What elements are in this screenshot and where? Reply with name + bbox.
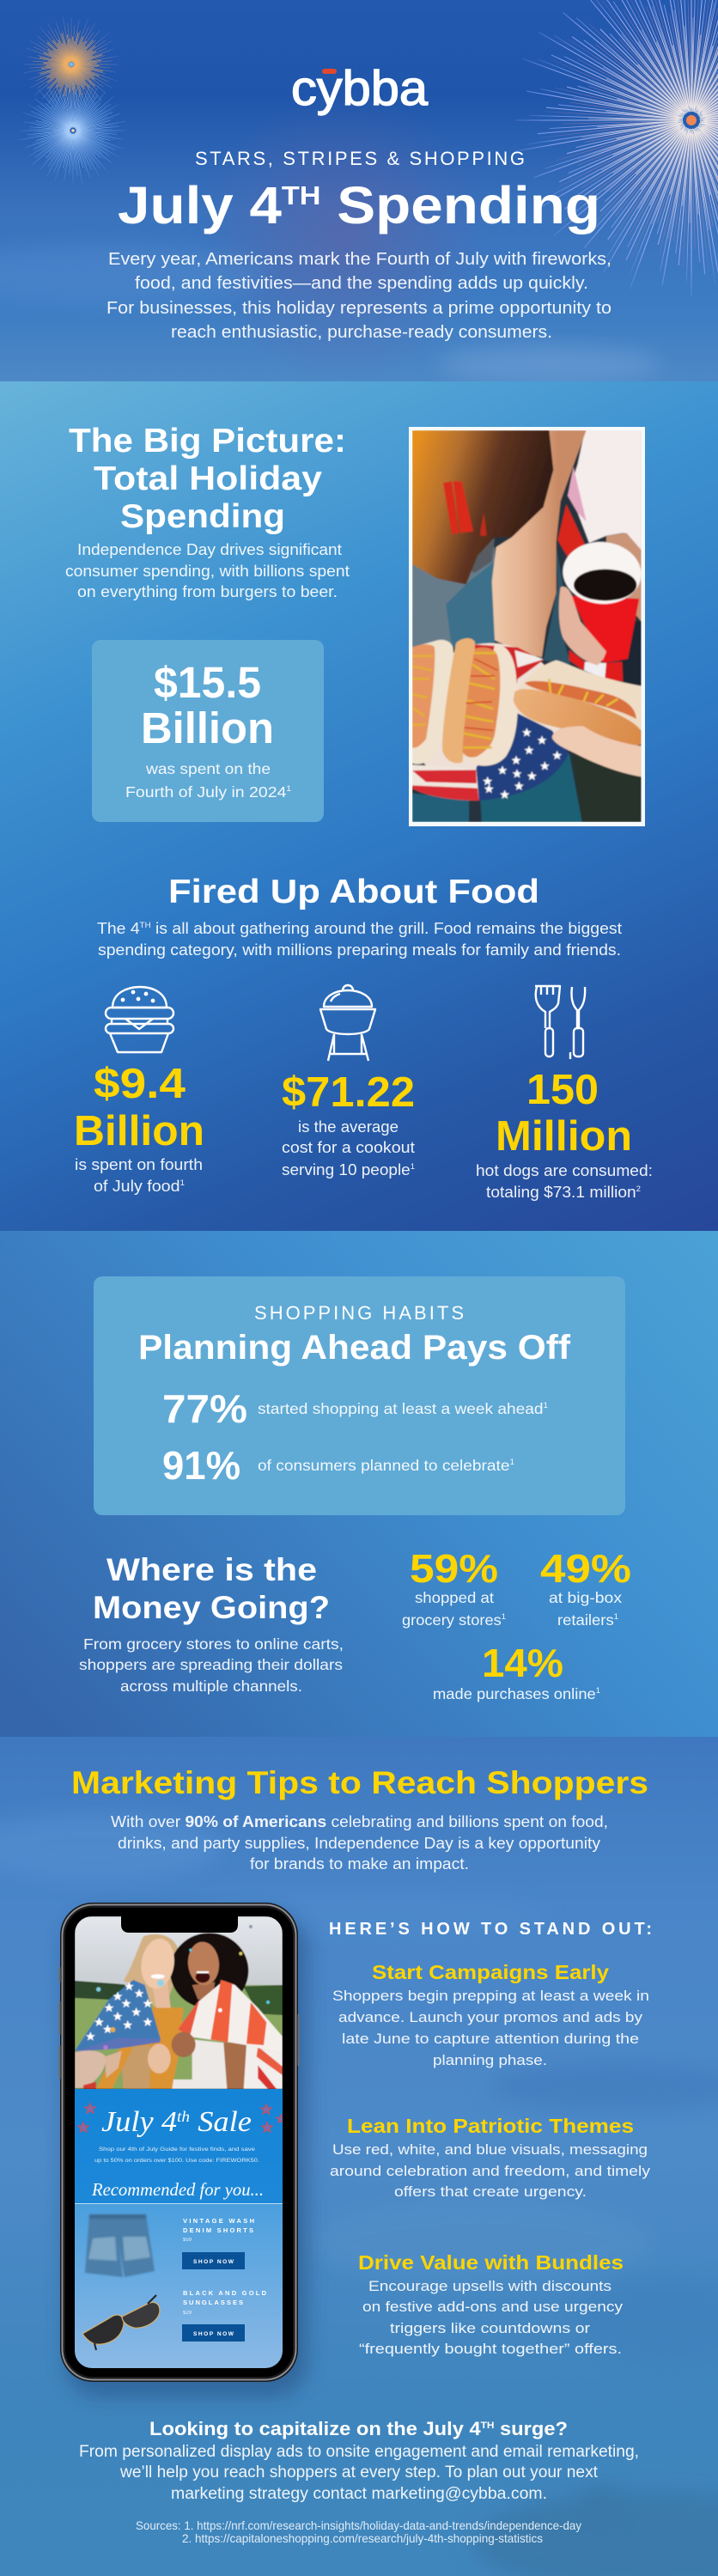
heading: planning ahead: Planning Ahead Pays Off — [138, 1329, 571, 1367]
stat: online: 1 — [596, 1686, 600, 1695]
stat: big-box retailers — [540, 1546, 631, 1629]
eyebrow: STARS, STRIPES & SHOPPING — [195, 148, 525, 169]
money text: across multiple channels. — [120, 1678, 302, 1695]
stat: cookout cost: is the average — [298, 1118, 399, 1136]
sources: 2. https://capitaloneshopping.com/research/july-4th-shopping-statistics — [182, 2531, 543, 2545]
stat: 91 percent: 91% — [162, 1443, 240, 1488]
call to action: we’ll help you reach shoppers at every step. To plan out your next — [119, 2463, 599, 2482]
stat: grocery stores: grocery stores — [402, 1611, 497, 1629]
food intro text: TH — [140, 921, 151, 929]
stat: food spend — [74, 1061, 204, 1195]
stat: cookout cost: $71.22 — [282, 1069, 415, 1116]
tip: start campaigns early: planning phase. — [433, 2052, 547, 2068]
food intro text — [97, 920, 622, 959]
stat: 77 percent: 77% — [162, 1386, 247, 1431]
money text: shoppers are spreading their dollars — [79, 1656, 343, 1673]
call to action — [79, 2418, 639, 2503]
stat: online: made purchases online — [433, 1685, 588, 1702]
heading: where is the money going — [93, 1552, 330, 1625]
phone heading: Sale — [190, 2106, 252, 2138]
stat: hot dogs: Million — [496, 1113, 632, 1160]
logo: cybba — [291, 61, 428, 116]
stat: online: 14% — [482, 1641, 563, 1685]
intro text: For businesses, this holiday represents a prime opportunity to — [106, 299, 612, 318]
stat: big-box retailers: 49% — [540, 1546, 631, 1591]
callout: total spending: $15.5 — [154, 658, 261, 707]
tip: start campaigns early: late June to capture attention during the — [342, 2031, 639, 2047]
sources: Sources: 1. https://nrf.com/research-insights/holiday-data-and-trends/independence-day — [136, 2518, 581, 2532]
eyebrow: shopping habits: SHOPPING HABITS — [254, 1302, 464, 1324]
heading: the big picture — [69, 423, 346, 535]
call to action: From personalized display ads to onsite engagement and email remarketing, — [79, 2443, 639, 2461]
heading: the big picture: Spending — [120, 498, 285, 535]
icon: grill tools — [535, 986, 585, 1059]
tip: bundles: triggers like countdowns or — [390, 2320, 590, 2336]
big picture text: on everything from burgers to beer. — [77, 583, 338, 600]
phone heading: July 4 — [101, 2106, 172, 2138]
stat: grocery stores: 59% — [410, 1546, 498, 1591]
tip: bundles — [358, 2251, 624, 2357]
icon: sunglasses — [82, 2295, 160, 2350]
button: shop now — [182, 2252, 245, 2269]
marketing intro text — [111, 1813, 608, 1873]
intro text: food, and festivities—and the spending adds up quickly. — [135, 274, 588, 293]
stat: hot dogs — [476, 1067, 653, 1201]
big picture text: Independence Day drives significant — [77, 541, 342, 558]
panel: big picture and food background — [0, 381, 718, 1231]
heading: the big picture: The Big Picture: — [69, 423, 346, 460]
stat: food spend: 1 — [180, 1178, 185, 1187]
icon: firework small blue — [17, 75, 129, 186]
product text: shorts: DENIM SHORTS — [183, 2226, 253, 2234]
tip: start campaigns early — [332, 1961, 649, 2068]
icon: denim shorts — [85, 2214, 155, 2277]
icon: firework large — [506, 0, 718, 306]
stat: 91 percent — [162, 1443, 514, 1488]
panel: marketing tips background — [0, 1737, 718, 2576]
stat: grocery stores: shopped at — [415, 1589, 494, 1606]
phone offer text: Shop our 4th of July Guide for festive finds, and save — [99, 2147, 255, 2153]
stat: cookout cost: serving 10 people — [282, 1161, 404, 1178]
stat: cookout cost: cost for a cookout — [282, 1139, 415, 1156]
phone notch — [121, 1916, 238, 1933]
heading: marketing tips: Marketing Tips to Reach Shoppers — [71, 1765, 648, 1800]
tip: bundles: on festive add-ons and use urgency — [362, 2299, 624, 2315]
icon: grill — [320, 985, 375, 1061]
food intro text: is all about gathering around the grill. Food remains the biggest — [151, 920, 622, 937]
big picture text — [65, 541, 350, 600]
stat: cookout cost: 1 — [411, 1162, 415, 1171]
tip: bundles: Encourage upsells with discounts — [368, 2278, 612, 2294]
heading: how to stand out: HERE’S HOW TO STAND OUT: — [329, 1920, 652, 1939]
stat: 91 percent: of consumers planned to celebrate — [258, 1457, 488, 1474]
call to action: Looking to capitalize on the July 4 — [149, 2418, 457, 2439]
call to action: surge? — [494, 2418, 568, 2439]
stat: hot dogs: 2 — [636, 1184, 641, 1193]
stat: food spend: is spent on fourth — [75, 1156, 203, 1173]
intro text — [106, 250, 612, 342]
tip: patriotic themes — [330, 2115, 651, 2200]
tip: patriotic themes: offers that create urgency. — [394, 2183, 587, 2200]
callout: total spending: Billion — [141, 703, 274, 752]
phone recommended heading: Recommended for you... — [91, 2179, 264, 2200]
stat: big-box retailers: 1 — [614, 1612, 618, 1621]
phone hero photo — [75, 1916, 283, 2089]
panel: planning ahead — [94, 1276, 625, 1515]
tip: patriotic themes: around celebration and freedom, and timely — [330, 2163, 651, 2179]
big picture text: consumer spending, with billions spent — [65, 563, 350, 580]
phone product list — [75, 2203, 283, 2368]
heading: the big picture: Total Holiday — [94, 460, 322, 497]
tip: bundles: Drive Value with Bundles — [358, 2251, 624, 2274]
title: TH — [282, 180, 321, 210]
tip: start campaigns early: advance. Launch your promos and ads by — [338, 2009, 643, 2025]
food intro text: The 4 — [97, 920, 137, 937]
phone offer text: up to 50% on orders over $100. Use code: FIREWORK50. — [94, 2158, 259, 2164]
stat: grocery stores — [402, 1546, 506, 1629]
money text — [79, 1635, 344, 1695]
stat: 91 percent: 1 — [510, 1458, 514, 1466]
phone offer text — [94, 2147, 259, 2164]
stat: food spend: Billion — [74, 1108, 204, 1154]
icon: firework small orange — [21, 15, 121, 114]
money text: From grocery stores to online carts, — [83, 1635, 344, 1653]
panel: shopping habits background — [0, 1231, 718, 1737]
sources — [136, 2518, 581, 2545]
photo: hot dogs and red cup — [409, 427, 645, 826]
callout: total spending: was spent on the — [145, 760, 271, 777]
call to action: marketing strategy contact marketing@cybba.com. — [171, 2485, 547, 2503]
stat: hot dogs: 150 — [526, 1067, 599, 1113]
phone star decorations — [78, 2103, 285, 2132]
tip: patriotic themes: Lean Into Patriotic Themes — [347, 2115, 634, 2137]
callout: total spending: Fourth of July in 2024 — [125, 783, 270, 801]
marketing intro text: drinks, and party supplies, Independence Day is a key opportunity — [118, 1835, 600, 1852]
button: shop now: SHOP NOW — [193, 2331, 234, 2337]
stat: hot dogs: totaling $73.1 million — [486, 1184, 627, 1201]
stat: big-box retailers: retailers — [557, 1611, 611, 1629]
heading: fired up about food: Fired Up About Food — [168, 874, 539, 910]
product text: sunglasses: BLACK AND GOLD — [183, 2289, 267, 2297]
product text: shorts: $59 — [183, 2238, 192, 2243]
panel: header background — [0, 0, 718, 384]
stat: cookout cost — [282, 1069, 415, 1178]
product text: shorts: VINTAGE WASH — [183, 2217, 254, 2225]
heading: where is the money going: Where is the — [106, 1552, 317, 1587]
product text: sunglasses: SUNGLASSES — [183, 2299, 243, 2306]
button: shop now — [182, 2324, 245, 2342]
title: Spending — [321, 176, 600, 234]
icon: burger — [106, 987, 173, 1052]
food intro text: spending category, with millions preparing meals for family and friends. — [98, 941, 621, 959]
button: shop now: SHOP NOW — [193, 2259, 234, 2265]
stat: 77 percent: 1 — [544, 1401, 548, 1410]
callout: total spending: 1 — [286, 784, 291, 793]
callout: total spending — [92, 640, 324, 822]
tip: start campaigns early: Start Campaigns Early — [372, 1961, 609, 1983]
phone sale banner — [75, 2089, 283, 2203]
product text: sunglasses: $29 — [183, 2311, 192, 2316]
stat: hot dogs: hot dogs are consumed: — [476, 1162, 653, 1179]
call to action: TH — [481, 2421, 494, 2431]
tip: bundles: “frequently bought together” offers. — [359, 2341, 622, 2357]
marketing intro text: for brands to make an impact. — [250, 1855, 469, 1873]
intro text: Every year, Americans mark the Fourth of July with fireworks, — [108, 250, 612, 269]
tip: start campaigns early: Shoppers begin prepping at least a week in — [332, 1988, 649, 2004]
stat: grocery stores: 1 — [502, 1612, 506, 1621]
stat: online — [433, 1641, 600, 1702]
stat: 77 percent: started shopping at least a week ahead — [258, 1400, 520, 1417]
product text: sunglasses — [183, 2291, 266, 2314]
heading: where is the money going: Money Going? — [93, 1590, 330, 1625]
stat: 77 percent — [162, 1386, 548, 1431]
marketing intro text: With over 90% of Americans celebrating and billions spent on food, — [111, 1813, 608, 1830]
title: July 4 — [118, 176, 266, 234]
phone heading: th — [177, 2108, 190, 2125]
intro text: reach enthusiastic, purchase-ready consumers. — [171, 323, 552, 342]
stat: big-box retailers: at big-box — [549, 1589, 622, 1606]
phone mockup — [58, 1903, 307, 2396]
product text: shorts — [183, 2219, 254, 2242]
tip: patriotic themes: Use red, white, and blue visuals, messaging — [332, 2141, 648, 2158]
stat: food spend: of July food — [94, 1178, 173, 1195]
stat: food spend: $9.4 — [94, 1061, 186, 1107]
